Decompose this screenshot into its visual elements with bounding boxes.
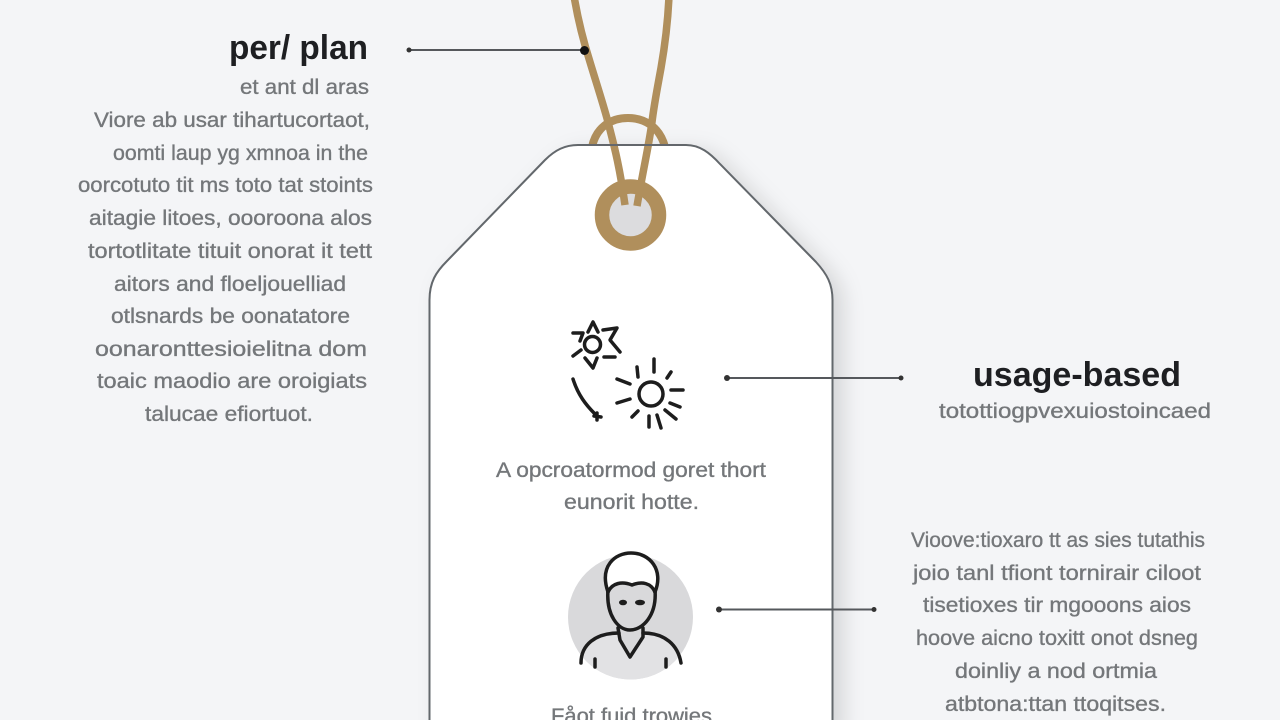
text block: tag center description: A opcroatormod goret thort [496, 459, 766, 482]
heading: per/ plan: per/ plan [229, 29, 368, 67]
text block: right description: tisetioxes tir mgooons aios [923, 594, 1191, 617]
text block: left description: tortotlitate tituit onorat it tett [88, 240, 372, 263]
icon: two suns with arrow [573, 322, 683, 428]
text block: left description: Viore ab usar tihartucortaot, [94, 109, 370, 132]
callout line: usage-based [724, 375, 904, 381]
text block: left description: et ant dl aras [240, 76, 369, 99]
text block: left description: toaic maodio are oroigiats [97, 370, 367, 393]
text block: left description: oorcotuto tit ms toto tat stoints [78, 174, 373, 197]
text block: right description [911, 529, 1205, 716]
text block: right description: doinliy a nod ortmia [955, 660, 1157, 683]
text block: left description [78, 76, 373, 426]
text block: right description: joio tanl tfiont tornirair ciloot [912, 562, 1201, 585]
tag eyelet and string [574, 0, 680, 244]
text block: left description: oonaronttesioielitna dom [95, 338, 367, 361]
text: usage-based subtitle: totottiogpvexuiostoincaed [939, 400, 1211, 423]
text block: right description: Vioove:tioxaro tt as sies tutathis [911, 529, 1205, 552]
text block: right description: atbtona:ttan ttoqitses. [945, 693, 1166, 716]
string loop behind tag [592, 118, 665, 147]
text block: tag center description [496, 459, 766, 514]
text block: left description: talucae efiortuot. [145, 403, 313, 426]
price tag body [430, 145, 832, 720]
text block: right description: hoove aicno toxitt onot dsneg [916, 627, 1198, 650]
heading: usage-based: usage-based [973, 356, 1181, 394]
text block: left description: otlsnards be oonatatore [111, 305, 350, 328]
text block: left description: aitagie litoes, oooroona alos [89, 207, 372, 230]
callout line: per/ plan [406, 46, 589, 55]
text block: left description: aitors and floeljouelliad [114, 273, 346, 296]
callout line: person [716, 606, 876, 612]
text block: tag center description: eunorit hotte. [564, 491, 699, 514]
text block: left description: oomti laup yg xmnoa in the [113, 142, 368, 165]
icon: person in circle [568, 553, 693, 690]
